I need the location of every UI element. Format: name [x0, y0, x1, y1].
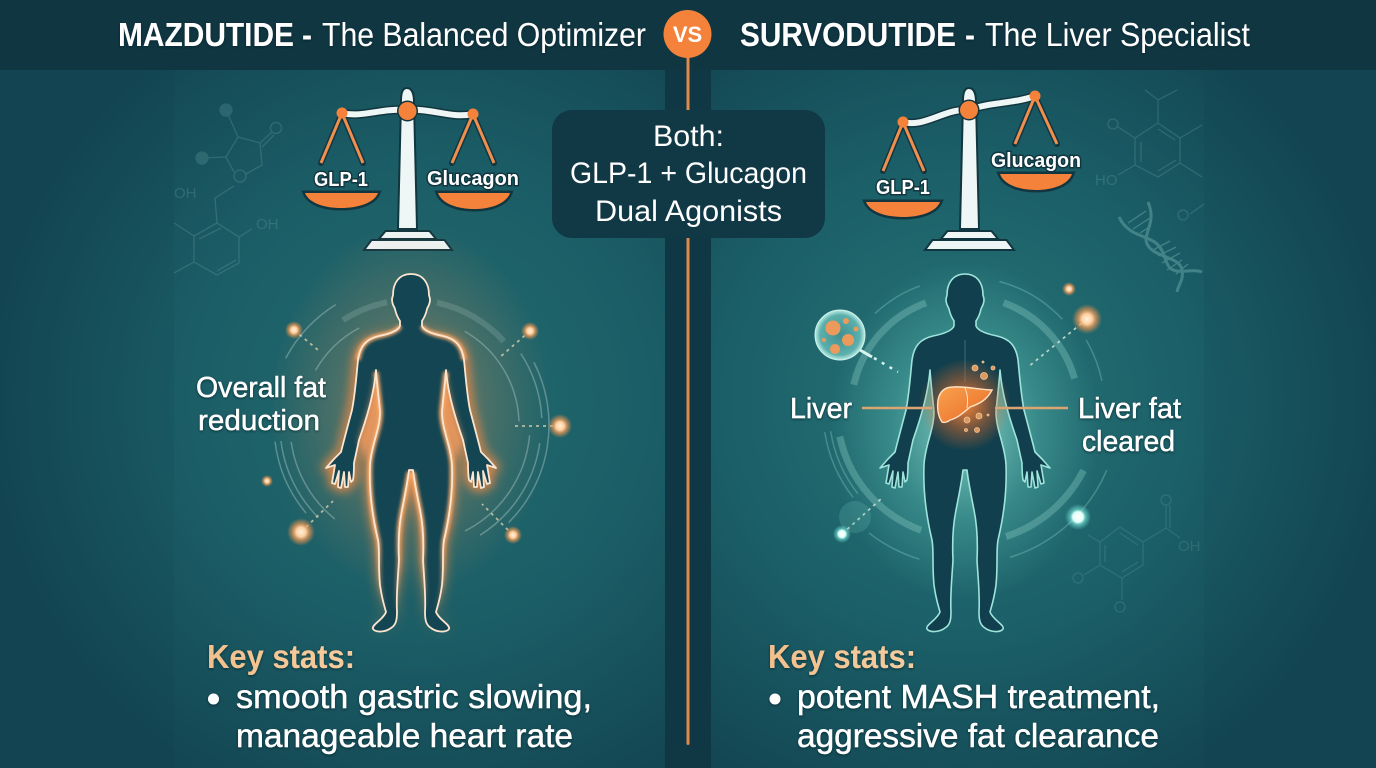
balance scale: tilted [866, 89, 1081, 249]
title: survodutide [740, 16, 1250, 53]
title: mazdutide: MAZDUTIDE [118, 16, 294, 53]
key stats: survodutide: Key stats: [768, 638, 916, 675]
title: mazdutide [118, 16, 646, 53]
icon: fat cell bubble [815, 310, 898, 372]
callout: overall fat reduction: Overall fat [196, 372, 326, 404]
balance scale: equal: Glucagon [427, 168, 519, 190]
balance scale: tilted: Glucagon [991, 150, 1081, 172]
molecule watermark left: OH [174, 185, 196, 202]
balance scale: equal: GLP-1 [314, 169, 368, 191]
header bar [0, 0, 1376, 70]
molecule watermark bottom right: OH [1178, 538, 1200, 555]
panel: mazdutide [0, 70, 665, 768]
icon: glowing liver [919, 359, 1011, 451]
title: mazdutide: - [302, 16, 312, 53]
balance scale: tilted: GLP-1 [876, 177, 930, 199]
molecule watermark top right [1095, 90, 1204, 220]
panel: survodutide [711, 70, 1376, 768]
body figure: liver [763, 208, 1167, 632]
vs badge [664, 10, 712, 58]
key stats: survodutide: potent MASH treatment, [797, 678, 1160, 715]
molecule watermark bottom right [1073, 495, 1200, 612]
key stats: mazdutide: manageable heart rate [236, 717, 573, 754]
key stats: survodutide: aggressive fat clearance [797, 717, 1159, 754]
callout: both dual agonists [552, 110, 825, 238]
callout: both dual agonists: Both: [653, 120, 724, 153]
callout: liver fat cleared: cleared [1082, 426, 1175, 458]
balance scale: equal [305, 89, 519, 249]
title: survodutide: - [965, 16, 975, 53]
callout: overall fat reduction [196, 372, 326, 437]
vs badge: VS [673, 22, 702, 47]
molecule watermark left [174, 104, 282, 275]
body figure: overall fat reduction [218, 225, 604, 632]
key stats: mazdutide: smooth gastric slowing, [236, 678, 592, 715]
molecule watermark top right: HO [1095, 172, 1118, 189]
center divider [665, 40, 711, 768]
title: survodutide: SURVODUTIDE [740, 16, 956, 53]
callout: overall fat reduction: reduction [198, 405, 320, 437]
callout: liver: Liver [790, 393, 852, 425]
callout: both dual agonists: GLP-1 + Glucagon [570, 157, 807, 190]
title: mazdutide: The Balanced Optimizer [322, 16, 646, 53]
molecule watermark left: OH [256, 216, 278, 233]
key stats: mazdutide: Key stats: [207, 638, 355, 675]
key stats: survodutide [768, 638, 1160, 754]
callout: liver fat cleared [1078, 393, 1181, 458]
liver connector lines [862, 407, 1068, 409]
key stats: mazdutide [207, 638, 592, 754]
callout: both dual agonists: Dual Agonists [595, 195, 782, 228]
icon: dna helix [1119, 202, 1202, 292]
title: survodutide: The Liver Specialist [985, 16, 1250, 53]
callout: liver fat cleared: Liver fat [1078, 393, 1181, 425]
